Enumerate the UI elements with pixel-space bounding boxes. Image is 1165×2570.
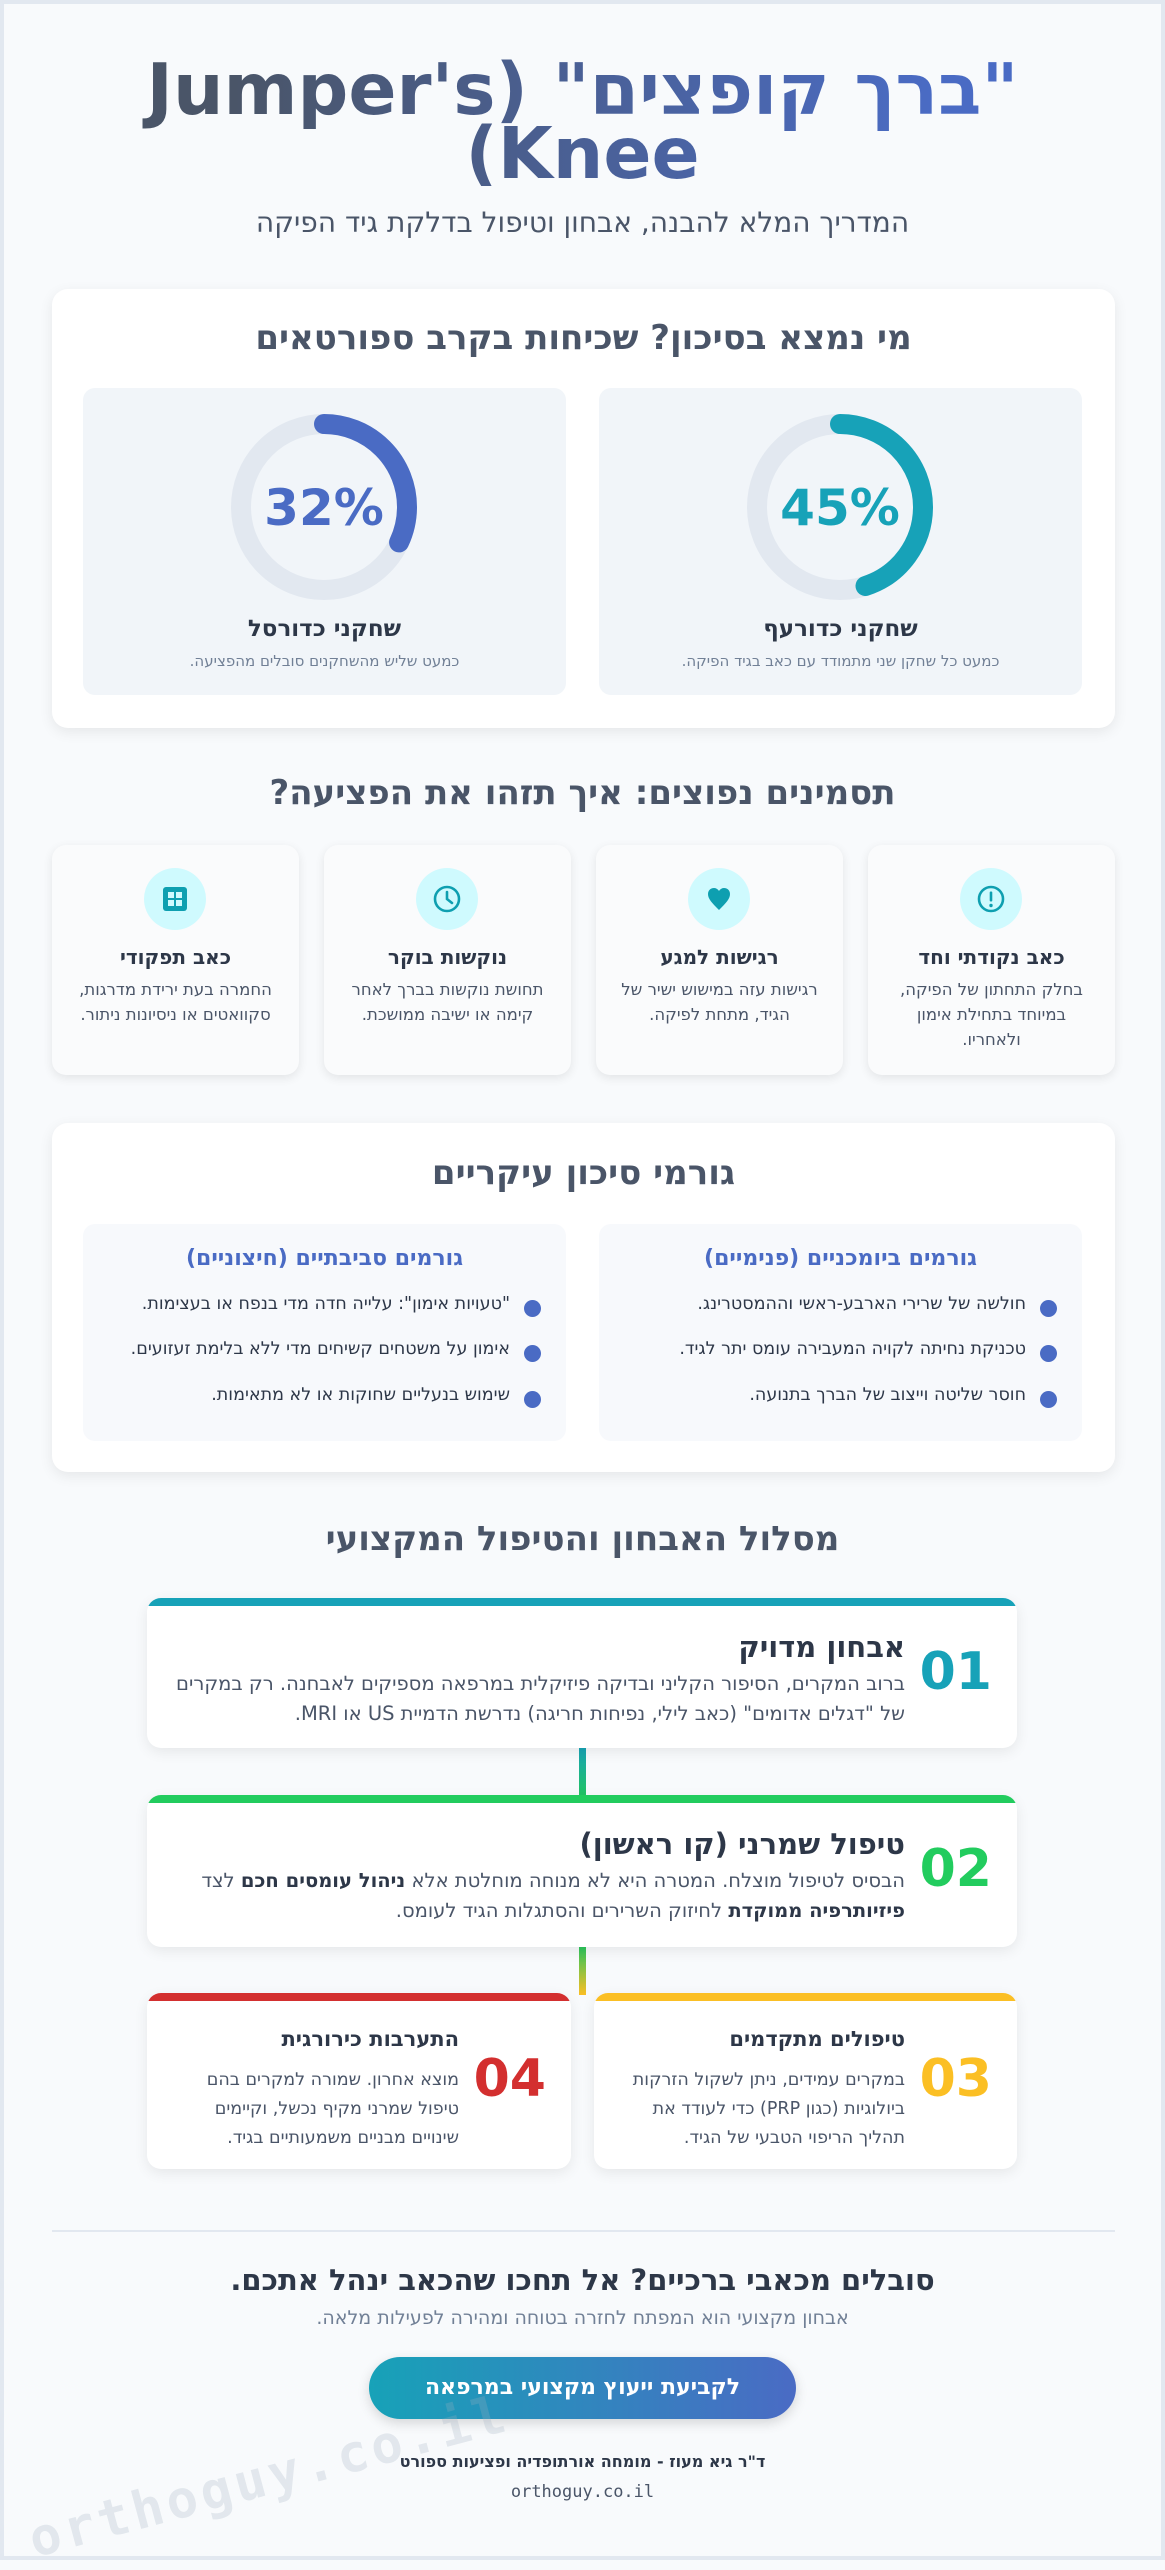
icon: clock xyxy=(416,868,478,930)
ring chart 32% xyxy=(231,414,417,600)
box: environmental: שימוש בנעליים שחוקות או לא מתאימות. xyxy=(211,1385,510,1405)
symptom card: functional pain: כאב תפקודי xyxy=(120,945,231,969)
symptom card: tenderness xyxy=(596,845,843,1075)
panel: prevalence xyxy=(52,289,1115,728)
watermark: orthoguy.co.il xyxy=(22,2384,515,2570)
box: environmental: גורמים סביבתיים (חיצוניים) xyxy=(186,1246,463,1271)
cta heading: סובלים מכאבי ברכיים? אל תחכו שהכאב ינהל אתכם. xyxy=(230,2263,935,2297)
box: biomechanical: טכניקת נחיתה לקויה המעבירה עומס יתר לגיד. xyxy=(679,1339,1026,1359)
step 03: 03 xyxy=(920,2049,992,2109)
symptom card: sharp pain xyxy=(868,845,1115,1075)
box: biomechanical: חוסר שליטה וייצוב של הברך בתנועה. xyxy=(749,1385,1026,1405)
cta button xyxy=(369,2357,796,2419)
box: environmental: אימון על משטחים קשיחים מדי ללא בלימת זעזועים. xyxy=(131,1339,510,1359)
step 01 xyxy=(147,1598,1017,1748)
step 03 xyxy=(594,1993,1017,2169)
symptom card: tenderness: רגישות עזה במישוש ישיר של הגיד, מתחת לפיקה. xyxy=(621,980,818,1024)
ring chart 45%: 45% xyxy=(780,479,900,537)
subtitle: המדריך המלא להבנה, אבחון וטיפול בדלקת גיד הפיקה xyxy=(256,206,909,239)
box: biomechanical: גורמים ביומכניים (פנימיים) xyxy=(704,1246,977,1271)
box: environmental xyxy=(83,1224,566,1441)
arrow: connector 1-2 xyxy=(579,1746,586,1798)
desc: basketball: כמעט שליש מהשחקנים סובלים מהפציעה. xyxy=(190,652,459,670)
arrow: connector 2-3 xyxy=(579,1945,586,1995)
cta subtext: אבחון מקצועי הוא המפתח לחזרה בטוחה ומהירה לפעילות מלאה. xyxy=(316,2307,849,2329)
label: football: שחקני כדורעף xyxy=(763,616,918,642)
icon: heart xyxy=(688,868,750,930)
url: orthoguy.co.il xyxy=(511,2482,654,2502)
symptom card: morning stiffness: נוקשות בוקר xyxy=(388,945,507,969)
box: biomechanical: חולשה של שרירי הארבע-ראשי וההמסטרינג. xyxy=(697,1294,1026,1314)
panel: risk factors xyxy=(52,1123,1115,1472)
symptom card: morning stiffness: תחושת נוקשות בברך לאחר קימה או ישיבה ממושכת. xyxy=(352,980,543,1024)
step 02 xyxy=(147,1795,1017,1947)
symptom card: functional pain xyxy=(52,845,299,1075)
icon: grid xyxy=(144,868,206,930)
symptom card: sharp pain: כאב נקודתי וחד xyxy=(918,945,1065,969)
step 04: 04 xyxy=(474,2049,546,2109)
symptom card: functional pain: החמרה בעת ירידת מדרגות, סקוואטים או ניסיונות ניתור. xyxy=(79,980,272,1024)
heading: pathway: מסלול האבחון והטיפול המקצועי xyxy=(326,1519,839,1559)
step 03: טיפולים מתקדמים xyxy=(729,2027,905,2051)
step 01: ברוב המקרים, הסיפור הקליני ובדיקה פיזיקלית במרפאה מספיקים לאבחנה. רק במקרים של "דגלים אדומים" (כאב לילי, נפיחות חריגה) נדרשת הדמיית US או MRI. xyxy=(176,1672,905,1725)
step 01: אבחון מדויק xyxy=(738,1630,905,1664)
box: environmental: "טעויות אימון": עלייה חדה מדי בנפח או בעצימות. xyxy=(142,1294,510,1314)
box: biomechanical xyxy=(599,1224,1082,1441)
label: basketball: שחקני כדורסל xyxy=(248,616,401,642)
step 04: מוצא אחרון. שמורה למקרים בהם טיפול שמרני מקיף נכשל, וקיימים שינויים מבניים משמעותיים בגיד. xyxy=(207,2070,459,2148)
ring chart 45% xyxy=(747,414,933,600)
ring chart 32%: 32% xyxy=(264,479,384,537)
step 04: התערבות כירורגית xyxy=(281,2027,459,2051)
desc: football: כמעט כל שחקן שני מתמודד עם כאב בגיד הפיקה. xyxy=(682,652,999,670)
symptom card: morning stiffness xyxy=(324,845,571,1075)
heading: symptoms: תסמינים נפוצים: איך תזהו את הפציעה? xyxy=(269,773,896,813)
step 02: 02 xyxy=(920,1839,992,1899)
step 02: הבסיס לטיפול מוצלח. המטרה היא לא מנוחה מוחלטת אלא ניהול עומסים חכם לצד פיזיותרפיה ממוקדת לחיזוק השרירים והסתגלות הגיד לעומס. xyxy=(201,1869,905,1922)
step 04 xyxy=(147,1993,571,2169)
symptom card: sharp pain: בחלק התחתון של הפיקה, במיוחד בתחילת אימון ולאחריו. xyxy=(900,980,1083,1049)
step 01: 01 xyxy=(920,1642,992,1702)
heading: prevalence: מי נמצא בסיכון? שכיחות בקרב ספורטאים xyxy=(255,318,912,358)
heading: risk factors: גורמי סיכון עיקריים xyxy=(432,1153,735,1193)
stat: basketball xyxy=(83,388,566,695)
title xyxy=(0,58,1165,186)
cta button: לקביעת ייעוץ מקצועי במרפאה xyxy=(425,2375,740,2400)
step 03: במקרים עמידים, ניתן לשקול הזרקות ביולוגיות (כגון PRP) כדי לעודד את תהליך הריפוי הטבעי של הגיד. xyxy=(633,2070,905,2148)
step 02: טיפול שמרני (קו ראשון) xyxy=(580,1827,905,1861)
title: "ברך קופצים" (Jumper's xyxy=(147,48,1018,131)
symptom card: tenderness: רגישות למגע xyxy=(660,945,779,969)
stat: football xyxy=(599,388,1082,695)
doctor credit: ד"ר גיא מעוז - מומחה אורתופדיה ופציעות ספורט xyxy=(400,2452,765,2471)
title: Knee) xyxy=(465,112,700,195)
icon: alert xyxy=(960,868,1022,930)
